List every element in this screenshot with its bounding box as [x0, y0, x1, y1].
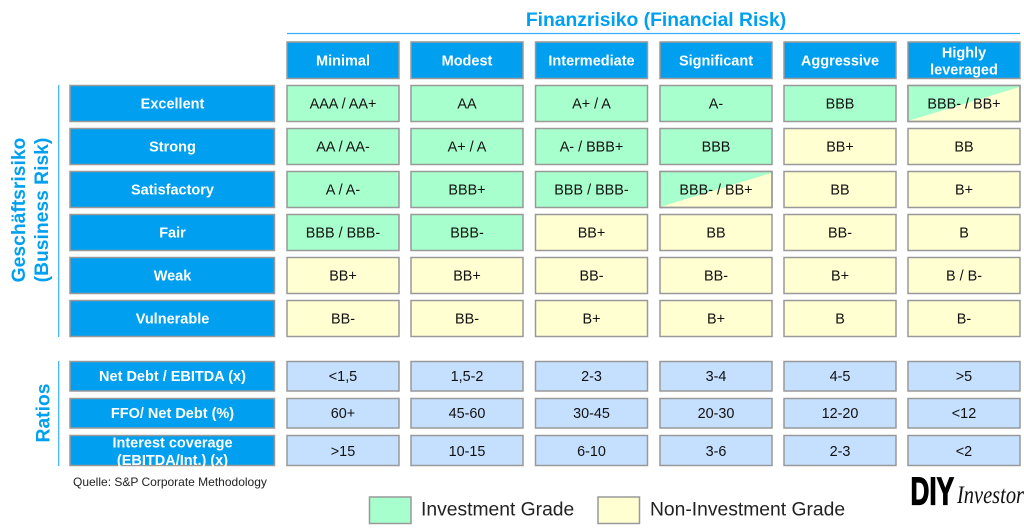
- row: Excellent: A-: [709, 96, 723, 112]
- row: Weak: BB-: [704, 268, 728, 284]
- row: Net Debt / EBITDA values: 2-3: [581, 369, 602, 385]
- row label: Net Debt / EBITDA: Net Debt / EBITDA (x): [99, 369, 246, 385]
- legend: investment grade: [370, 497, 574, 524]
- row: Satisfactory: [287, 172, 1020, 208]
- logo: DIY Investor: DIY: [910, 470, 954, 514]
- row label: FFO / Net Debt: FFO/ Net Debt (%): [111, 406, 234, 422]
- row: Strong: BBB: [702, 140, 730, 156]
- axis label: business risk: [9, 85, 59, 337]
- row: Vulnerable: B+: [582, 312, 601, 328]
- header: Intermediate: [536, 42, 648, 78]
- row: FFO / Net Debt values: 45-60: [449, 406, 485, 422]
- column headers: [287, 42, 1020, 78]
- row: Interest coverage values: >15: [331, 444, 355, 460]
- row: Weak: BB+: [329, 268, 357, 284]
- row: Interest coverage values: 6-10: [577, 444, 606, 460]
- row label: Fair: [70, 214, 274, 250]
- source note: Quelle: S&P Corporate Methodology: [73, 475, 267, 489]
- header: Minimal: Minimal: [316, 54, 370, 70]
- row: Satisfactory: A / A-: [326, 182, 360, 198]
- row: Vulnerable: B-: [957, 312, 971, 328]
- row label: Weak: Weak: [154, 268, 192, 284]
- row: Vulnerable: BB-: [455, 312, 479, 328]
- legend: investment grade: Investment Grade: [421, 500, 574, 520]
- row: Satisfactory: BB: [830, 182, 850, 198]
- row labels: ratios: [70, 362, 274, 469]
- header: Significant: Significant: [679, 54, 753, 70]
- row: Satisfactory: BBB+: [448, 182, 486, 198]
- header: Highly leveraged: [908, 42, 1020, 78]
- legend: non-investment grade: [598, 497, 845, 524]
- row: Vulnerable: B+: [707, 312, 725, 328]
- header: Highly leveraged: Highly: [942, 46, 986, 62]
- row: Excellent: AA: [457, 96, 477, 112]
- axis label: business risk: Geschäftsrisiko: [9, 137, 30, 282]
- rating grid: [287, 86, 1020, 336]
- row: Excellent: [287, 86, 1020, 122]
- row label: Interest coverage: [70, 436, 274, 469]
- title: financial risk: Finanzrisiko (Financial Risk): [526, 10, 786, 31]
- row label: Interest coverage: Interest coverage: [112, 436, 233, 452]
- row: FFO / Net Debt values: 60+: [331, 406, 355, 422]
- row label: Net Debt / EBITDA: [70, 362, 274, 391]
- row: Interest coverage values: [287, 436, 1020, 466]
- row: Interest coverage values: 3-6: [706, 444, 726, 460]
- row: Net Debt / EBITDA values: 4-5: [830, 369, 850, 385]
- row: Interest coverage values: <2: [956, 444, 972, 460]
- header: Aggressive: Aggressive: [801, 54, 879, 70]
- row: FFO / Net Debt values: <12: [952, 406, 976, 422]
- row: Fair: BBB-: [450, 226, 484, 242]
- row: Net Debt / EBITDA values: 3-4: [706, 369, 726, 385]
- row: FFO / Net Debt values: [287, 398, 1020, 428]
- row: Weak: B+: [831, 268, 849, 284]
- header: Aggressive: [784, 42, 896, 78]
- axis label: business risk: (Business Risk): [32, 138, 53, 282]
- header: Modest: [411, 42, 523, 78]
- row: Fair: BB+: [578, 226, 605, 242]
- row: FFO / Net Debt values: 30-45: [573, 406, 610, 422]
- header: Intermediate: Intermediate: [548, 54, 635, 70]
- row label: Interest coverage: (EBITDA/Int.) (x): [117, 453, 228, 469]
- row: FFO / Net Debt values: 20-30: [698, 406, 734, 422]
- row: Weak: BB+: [453, 268, 481, 284]
- row: Strong: A- / BBB+: [560, 140, 623, 156]
- row: Net Debt / EBITDA values: [287, 362, 1020, 391]
- header: Highly leveraged: leveraged: [930, 62, 998, 78]
- ratio grid: [287, 362, 1020, 466]
- axis label: ratios: Ratios: [34, 384, 54, 442]
- logo: DIY Investor: [910, 470, 1024, 514]
- row: Excellent: BBB- / BB+: [927, 96, 1001, 112]
- row: Weak: BB-: [580, 268, 604, 284]
- row label: Fair: Fair: [159, 226, 186, 242]
- row label: Excellent: Excellent: [141, 96, 205, 112]
- row label: Vulnerable: [70, 300, 274, 336]
- row: Fair: BBB / BBB-: [306, 226, 380, 242]
- row: Vulnerable: [287, 300, 1020, 336]
- row: Excellent: BBB: [826, 96, 854, 112]
- axis label: ratios: [34, 361, 59, 466]
- row: Net Debt / EBITDA values: <1,5: [329, 369, 357, 385]
- legend: non-investment grade: Non-Investment Grade: [650, 500, 845, 520]
- row label: Vulnerable: Vulnerable: [136, 312, 209, 328]
- row: Excellent: AAA / AA+: [310, 96, 376, 112]
- row: Vulnerable: B: [835, 312, 845, 328]
- row: Satisfactory: BBB / BBB-: [554, 182, 629, 198]
- row: Satisfactory: BBB- / BB+: [679, 182, 753, 198]
- row label: Satisfactory: [70, 172, 274, 208]
- row: Excellent: A+ / A: [572, 96, 611, 112]
- row: Satisfactory: B+: [955, 182, 973, 198]
- row label: Strong: [70, 128, 274, 164]
- row: Fair: BB: [706, 226, 726, 242]
- row: Strong: BB: [954, 140, 974, 156]
- row: Net Debt / EBITDA values: 1,5-2: [451, 369, 483, 385]
- row: Interest coverage values: 10-15: [449, 444, 485, 460]
- row label: Satisfactory: Satisfactory: [131, 182, 214, 198]
- header: Modest: Modest: [442, 54, 493, 70]
- row: Vulnerable: BB-: [331, 312, 355, 328]
- row label: Excellent: [70, 86, 274, 122]
- row: Strong: A+ / A: [448, 140, 487, 156]
- row label: Weak: [70, 258, 274, 294]
- row: Fair: BB-: [828, 226, 852, 242]
- row: Interest coverage values: 2-3: [830, 444, 850, 460]
- header: Significant: [660, 42, 772, 78]
- row: Strong: AA / AA-: [316, 140, 370, 156]
- row: FFO / Net Debt values: 12-20: [822, 406, 858, 422]
- row label: FFO / Net Debt: [70, 398, 274, 428]
- row: Strong: BB+: [826, 140, 854, 156]
- row labels: business risk: [70, 86, 274, 336]
- row: Fair: [287, 214, 1020, 250]
- row: Weak: [287, 258, 1020, 294]
- row: Weak: B / B-: [946, 268, 982, 284]
- header: Minimal: [287, 42, 399, 78]
- row: Net Debt / EBITDA values: >5: [956, 369, 972, 385]
- row: Fair: B: [959, 226, 969, 242]
- row: Strong: [287, 128, 1020, 164]
- row label: Strong: Strong: [149, 140, 196, 156]
